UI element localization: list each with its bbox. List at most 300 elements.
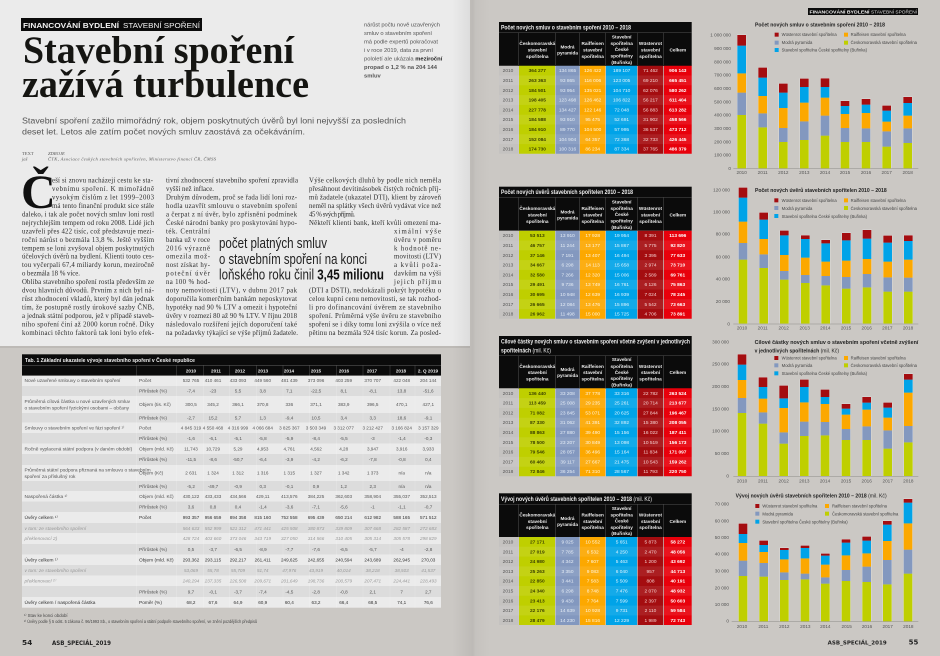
data rows: 5 463	[616, 559, 628, 565]
data rows: 2012	[503, 559, 514, 565]
table rows: 4 066 684	[252, 426, 273, 430]
footnotes	[24, 613, 258, 624]
table rows: 384,225	[308, 494, 325, 499]
column headers: spořitelna	[610, 41, 633, 46]
table rows: 428 724	[183, 536, 200, 541]
data rows: 59 584	[670, 608, 685, 614]
table rows: 9,7	[188, 590, 195, 594]
article column 1: tempem se loni zvyšoval objem poskytnutých	[22, 245, 155, 252]
data rows: 39 117	[560, 459, 575, 465]
data rows: 11 498	[560, 312, 575, 318]
y axis	[710, 33, 731, 171]
table rows: 336	[285, 402, 294, 407]
column headers: Českomoravská	[519, 511, 556, 517]
table rows: -0,7	[424, 504, 433, 510]
table rows: 314 566	[308, 536, 325, 541]
table rows: 612 982	[364, 515, 381, 520]
article column 3: davkům na výši	[394, 271, 441, 278]
article column 2: doporučila komerčním bankám neposkytovat	[166, 296, 297, 303]
column headers: Celkem	[669, 212, 686, 218]
data rows: 580 262	[669, 88, 687, 94]
table rows: 403 259	[335, 378, 352, 383]
column headers: spořitelna	[639, 54, 662, 59]
subheading: deset let. Letos ale zatím počet nových smluv zaostává za očekáváním.	[22, 126, 305, 136]
column headers: spořitelna	[639, 525, 662, 530]
table rows: 0,9	[313, 484, 320, 489]
article column 1	[22, 178, 155, 337]
data rows: 2018	[503, 469, 514, 475]
column headers: Modrá	[560, 44, 575, 50]
column headers	[519, 34, 686, 65]
data rows: 2017	[503, 608, 514, 614]
table rows: 53,069	[184, 568, 198, 573]
data rows: 1 200	[644, 559, 657, 565]
title	[22, 29, 309, 106]
table rows: -5,1	[234, 436, 242, 441]
table rows: 3 212 427	[362, 426, 383, 430]
data rows: 2017	[503, 302, 514, 308]
column headers: Stavební	[612, 34, 632, 40]
table title: Tab. 1 Základní ukazatele vývoje stavebního spoření v České republice	[25, 357, 195, 364]
data rows: 2011	[503, 243, 513, 249]
table rows: 1 342	[338, 470, 350, 476]
table rows: Objem (mld. Kč)	[139, 494, 174, 500]
data rows: 71 462	[643, 68, 658, 74]
data rows: 8 391	[644, 233, 657, 239]
table rows: 380 873	[308, 526, 325, 531]
data rows: 198 405	[529, 98, 546, 104]
article column 1: tím, že postupně rostly úrokové sazby ČNB,	[22, 304, 154, 312]
data rows: 72 048	[614, 107, 629, 113]
table rows: 355,037	[393, 494, 410, 499]
legend: Raiffeisen stavební spořitelna	[851, 356, 906, 361]
table rows: 1,2	[341, 484, 347, 489]
table rows: 41,537	[421, 568, 436, 573]
article column 2: tivní zhodnocení stavebního spoření zpravidla	[166, 178, 298, 184]
data rows: 77 633	[670, 253, 685, 259]
table rows: -3,9	[285, 457, 294, 462]
data rows: 7 476	[616, 588, 628, 594]
table rows: n/a	[425, 484, 432, 489]
data rows: 2018	[503, 312, 514, 318]
table rows: 403 660	[205, 536, 222, 541]
column headers: spořitelna	[610, 206, 633, 211]
table rows: -7,8	[369, 457, 377, 462]
y axis: 70 000	[715, 502, 729, 507]
data rows: 32 580	[530, 272, 545, 278]
data rows: 134 865	[559, 68, 576, 74]
data rows: 64 357	[585, 137, 600, 143]
x axis years: 2012	[778, 478, 789, 483]
table rows: 993 357	[183, 515, 200, 520]
article column 2: vyšší než inflace.	[166, 186, 214, 193]
column headers: Wüstenrot	[639, 512, 663, 517]
table rows: 10,5	[312, 416, 321, 420]
article column 3: spoření se i díky tomu loni zvýšila o více než	[309, 322, 441, 328]
table rows: 307 668	[364, 526, 381, 531]
x axis years: 2010	[737, 325, 748, 330]
table rows: 11,743	[184, 446, 198, 452]
section label: left page: FINANCOVÁNÍ BYDLENÍ	[23, 21, 120, 30]
table rows: 237,335	[204, 578, 222, 584]
table rows	[24, 378, 439, 606]
data rows: 100 316	[559, 147, 576, 153]
x axis years: 2016	[861, 325, 872, 330]
data rows: 123 005	[613, 78, 631, 84]
data rows: 14 113	[586, 263, 600, 269]
table rows: 300,5	[185, 402, 197, 407]
table rows: 1 315	[284, 470, 295, 476]
data rows: 13 098	[614, 440, 629, 446]
data rows: 135 021	[584, 88, 602, 94]
data rows: 486 379	[669, 147, 687, 153]
data rows: 29 235	[585, 401, 600, 407]
data rows: 7 191	[561, 253, 574, 259]
y axis: 100 000	[713, 210, 730, 215]
legend	[774, 198, 917, 219]
column headers: spořitelna	[526, 54, 549, 59]
table rows: 60,9	[258, 600, 268, 605]
table rows: 51,74	[257, 568, 269, 573]
sidebar note: smluv o stavebním spoření	[364, 31, 432, 37]
table rows: 4,953	[257, 446, 269, 452]
data rows: 92 820	[670, 243, 685, 249]
data rows: 9 736	[561, 282, 574, 288]
table rows: 204 144	[420, 378, 437, 383]
section label: left page: STAVEBNÍ SPOŘENÍ	[123, 21, 201, 30]
table rows: 0,5	[188, 547, 195, 552]
section label: right page: FINANCOVÁNÍ BYDLENÍ	[810, 8, 870, 15]
table rows: 370 707	[364, 378, 381, 383]
table rows: 55,709	[231, 568, 245, 573]
data rows: 72 743	[670, 618, 685, 624]
table rows: spoření za příslušný rok	[24, 474, 76, 480]
table rows: 3,947	[367, 446, 379, 452]
table: basic indicators	[22, 354, 441, 608]
data rows: 611 404	[669, 98, 687, 104]
article column 1: dvou hlavních důvodů. Prvním z nich byl ná-	[22, 288, 155, 295]
data rows: 15 896	[614, 302, 629, 308]
table rows: 3,3	[370, 416, 376, 420]
y axis: 0	[727, 321, 730, 326]
column headers: (Buřinka)	[611, 60, 632, 65]
table rows: -0,8	[398, 457, 406, 462]
data rows: 2014	[503, 430, 514, 436]
data rows: 36 254	[560, 469, 575, 475]
column headers: (Buřinka)	[611, 382, 632, 387]
article column 1: kombinaci těchto faktorů tak loni bylo efek-	[22, 330, 155, 337]
column headers: stavební	[583, 48, 603, 52]
column headers: spořitelna	[526, 376, 549, 381]
table rows: překlenovací 2)	[24, 536, 58, 542]
table rows: 38,218	[366, 568, 380, 573]
table rows: 0,4	[235, 504, 242, 510]
table rows: Úvěry celkem / naspořená částka	[24, 599, 96, 606]
stacked bars	[739, 499, 912, 621]
table rows: -4	[400, 547, 404, 552]
data rows: 6 126	[644, 282, 657, 288]
legend	[755, 504, 899, 524]
data rows: 2018	[503, 147, 514, 153]
table rows: -1,4	[259, 504, 267, 510]
table rows: -6,1	[209, 436, 217, 441]
y axis: 0	[726, 474, 729, 479]
article column 1: o bezmála 18 % více.	[22, 271, 80, 278]
sidebar note: má podle expertů pokračovat	[364, 38, 438, 45]
legend: Českomoravská stavební spořitelna	[851, 362, 917, 368]
table rows: 956 659	[205, 515, 222, 520]
table title: spořitelnách (mil. Kč)	[501, 348, 551, 354]
data rows: 28 057	[560, 450, 575, 456]
table rows: Naspořená částka ¹⁾	[24, 494, 67, 500]
y axis: 40 000	[716, 277, 730, 282]
table rows: 552 999	[205, 526, 222, 531]
table rows: -6,2	[340, 457, 348, 462]
article column 3: jejich příjmu	[393, 279, 442, 286]
table rows: 10,729	[206, 446, 220, 452]
table: loan development	[499, 493, 692, 625]
stacked bars	[738, 354, 913, 476]
table rows: 433 093	[230, 378, 247, 383]
table rows: -7,4	[187, 388, 195, 394]
table rows: 64,9	[234, 600, 243, 605]
table rows: -1	[371, 504, 375, 510]
table rows: Objem (tis. Kč)	[139, 402, 171, 408]
article column 1: uzavřeli přes 422 tisíc, což představuje mezi-	[22, 228, 155, 235]
table rows: Poměr (%)	[139, 600, 162, 606]
table rows: 358,904	[364, 494, 381, 499]
title: Stavební spoření	[23, 29, 295, 72]
chart: target amounts	[712, 339, 919, 483]
data rows: 46 757	[530, 243, 545, 249]
table rows: 396,5	[367, 402, 379, 407]
table rows: 345,2	[207, 402, 219, 407]
subheading	[22, 116, 406, 136]
table rows: -4,5	[285, 590, 294, 594]
y axis: 300 000	[714, 126, 731, 131]
table rows: Počet	[139, 426, 152, 432]
column headers: stavební	[528, 519, 547, 524]
column headers: spořitelny	[610, 376, 633, 381]
column headers: Celkem	[669, 48, 686, 52]
table year header: 2011	[211, 368, 221, 373]
table rows: 261,411	[255, 558, 271, 562]
data rows: 33 316	[614, 391, 629, 397]
data rows: 30 849	[585, 440, 600, 446]
table rows: Objem (Kč)	[139, 470, 164, 476]
x axis years: 2017	[882, 624, 893, 629]
article column 3: movitosti (LTV)	[394, 254, 441, 261]
legend: Stavební spořitelna České spořitelny (Buřinka)	[782, 370, 867, 376]
table rows: Úvěry celkem ¹⁾	[24, 556, 58, 564]
y axis: 20 000	[715, 585, 729, 590]
x axis years: 2015	[841, 325, 852, 330]
x axis years: 2012	[778, 170, 789, 175]
legend: Modrá pyramida	[782, 40, 813, 45]
column headers: Raiffeisen	[581, 512, 604, 517]
y axis: 500 000	[714, 99, 731, 104]
table year header: 2012	[235, 368, 246, 373]
data rows: 69 210	[643, 78, 658, 84]
table title: Počet nových úvěrů stavebních spořitelen 2010 – 2018	[501, 189, 634, 196]
data rows: 34 667	[530, 263, 545, 269]
x axis years: 2014	[820, 624, 831, 629]
table rows: 272 683	[419, 526, 437, 531]
chart title: Vývoj nových úvěrů stavebních spořitelen 2010 – 2018 (mil. Kč)	[736, 492, 887, 499]
table rows: -9,1	[424, 416, 433, 420]
data rows: 126 462	[584, 98, 602, 104]
data rows: 12 639	[585, 292, 600, 298]
data rows: 58 272	[670, 539, 685, 545]
column headers: Wüstenrot	[639, 206, 663, 211]
data rows: 171 097	[669, 450, 687, 456]
data rows: 9 731	[616, 608, 628, 614]
table rows: -7,7	[285, 547, 294, 552]
data rows: 2010	[503, 68, 514, 74]
data rows: 220 750	[669, 469, 687, 475]
data rows: 73 710	[670, 263, 685, 269]
x axis years: 2015	[841, 478, 852, 483]
table rows: -0,1	[285, 484, 294, 489]
credits	[21, 151, 217, 162]
table rows: 47,976	[282, 568, 297, 573]
article column 3	[309, 178, 442, 337]
x axis years: 2016	[861, 478, 872, 483]
legend	[775, 32, 917, 53]
data rows	[503, 391, 687, 475]
data rows: 88 863	[530, 430, 545, 436]
table rows: 5,5	[235, 388, 242, 394]
legend: Wüstenrot stavební spořitelna	[782, 198, 837, 203]
data rows: 613 282	[669, 107, 687, 113]
table rows: 293,362	[183, 558, 200, 562]
article column 1: vebnímu spoření. K mimořádně	[52, 186, 154, 193]
legend: Wüstenrot stavební spořitelna	[782, 356, 837, 361]
data rows: 24 980	[530, 559, 545, 565]
table rows: 67,6	[209, 600, 218, 605]
column headers	[519, 357, 686, 387]
y axis: 60 000	[715, 518, 729, 523]
table rows: v tom: ze stavebního spoření	[24, 526, 87, 532]
table title: Počet nových smluv o stavebním spoření 2010 – 2018	[501, 26, 632, 32]
y axis: 900 000	[714, 46, 731, 51]
table rows: 429,11	[256, 494, 270, 499]
page footer left: ASB_SPECIÁL_2019	[52, 640, 111, 647]
pull quote: o stavebním spoření na konci	[219, 251, 367, 268]
table rows: 3,916	[396, 446, 408, 452]
data rows	[503, 540, 685, 624]
table rows: -5,5	[340, 436, 348, 441]
table rows: -49,7	[208, 484, 219, 489]
table rows: -3,6	[285, 504, 294, 510]
column headers: Modrá	[560, 210, 575, 214]
data rows: 53 513	[530, 233, 545, 239]
column headers: spořitelny	[610, 54, 633, 58]
data rows: 93 954	[560, 88, 575, 94]
x axis years: 2012	[778, 325, 789, 330]
data rows: 458 566	[669, 117, 687, 123]
article column 3: pětinu na bezmála 924 tisíc korun. Za posled-	[309, 330, 442, 337]
data rows: 36 496	[585, 450, 600, 456]
stacked bars	[737, 35, 912, 168]
data rows: 2010	[503, 391, 514, 397]
table rows: 43,919	[309, 568, 323, 573]
x axis years: 2012	[779, 624, 790, 629]
table rows: 370,8	[257, 402, 269, 407]
article column 1: Obliba stavebního spoření rostla především ze	[22, 279, 154, 286]
table rows: 7,1	[286, 388, 293, 394]
column headers: Celkem	[669, 370, 686, 375]
data rows: 29 491	[530, 282, 545, 288]
table rows: 4 316 999	[228, 426, 249, 430]
article column 3: ximální výše	[394, 228, 441, 235]
table rows: -8,1	[369, 388, 377, 394]
column headers: stavební	[583, 370, 603, 375]
table rows: Počet	[139, 515, 152, 521]
article column 3: (DTI a DSTI), nedokázali pokrýt hypotéku o	[309, 288, 442, 295]
table rows: Přírůstek (%)	[139, 504, 167, 510]
column headers: spořitelna	[526, 219, 549, 224]
data rows: 426 445	[669, 137, 687, 143]
table rows: -7,4	[259, 590, 267, 594]
x axis years: 2011	[758, 325, 768, 330]
table rows: 228,493	[419, 578, 437, 584]
legend	[774, 356, 917, 376]
data rows: 9 430	[561, 598, 574, 604]
data rows: 665 451	[669, 78, 687, 84]
x axis years: 2010	[737, 624, 748, 629]
data rows: 57 995	[614, 127, 629, 133]
table rows: 40,014	[337, 568, 351, 573]
table rows: 242,655	[308, 558, 325, 562]
data rows: 2012	[503, 410, 514, 416]
y axis: 20 000	[716, 299, 730, 304]
data rows: 17 928	[585, 233, 600, 239]
table rows: Průměrná státní podpora přiznaná na smlouvu o stavebním	[24, 466, 151, 474]
article column 2: hypotéky nad 90 % LTV a omezit i hypoteční	[166, 304, 297, 312]
table rows: 371,1	[310, 402, 322, 407]
x axis years: 2018	[902, 170, 913, 175]
data rows: 93 910	[560, 117, 575, 123]
data rows: 16 939	[614, 292, 629, 298]
table rows: -0,9	[234, 484, 242, 489]
x axis years: 2013	[799, 325, 810, 330]
legend: Wüstenrot stavební spořitelna	[782, 32, 837, 37]
x axis years: 2017	[882, 325, 893, 330]
table rows: 3 825 367	[279, 426, 300, 430]
table rows: Nové uzavřené smlouvy o stavebním spoření	[24, 378, 121, 384]
data rows: 122 146	[584, 107, 602, 113]
pull quote	[219, 235, 384, 284]
table rows: 413,576	[281, 494, 298, 499]
data rows: 56 883	[643, 107, 658, 113]
y axis: 700 000	[714, 73, 731, 78]
table rows: o stavebním spoření fyzickými osobami – občany	[24, 406, 130, 412]
article column 2: omezila mož-	[166, 254, 211, 261]
table rows: -7,1	[312, 504, 320, 510]
table rows: 1 324	[207, 470, 219, 476]
data rows: 227 778	[529, 107, 546, 113]
y axis	[712, 339, 729, 479]
table rows: 650 214	[335, 515, 352, 520]
table rows: 383,9	[338, 402, 350, 407]
data rows: 2010	[503, 233, 514, 239]
data rows: 27 019	[530, 549, 545, 555]
x axis years: 2010	[736, 170, 747, 175]
article column 1: nejrychlejším tempem od roku 2008. Lidé jich	[22, 220, 155, 227]
column headers: Stavební	[612, 357, 632, 362]
x axis years: 2010	[737, 478, 748, 483]
